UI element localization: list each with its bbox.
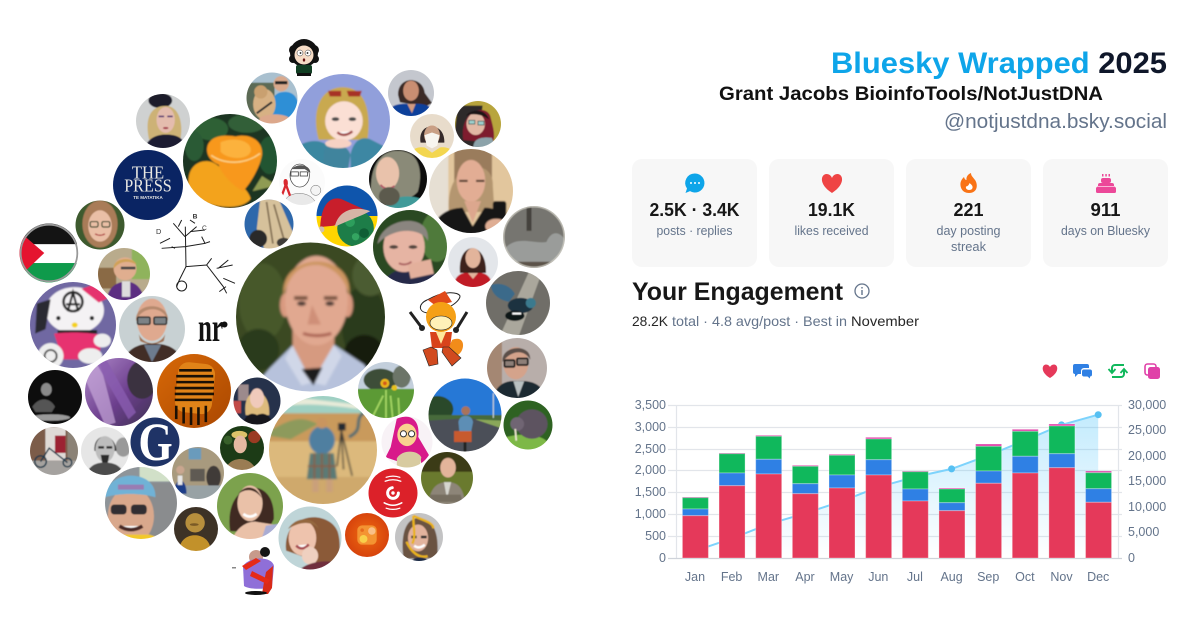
bar: Jan — [682, 497, 708, 558]
icon: quotes — [1145, 364, 1160, 379]
month labels: Sep — [977, 570, 999, 584]
avatar: daffodils in a field — [358, 362, 414, 418]
avatar: The Press logo: PRESS — [124, 176, 172, 196]
avatar: cyclist on road — [428, 378, 502, 452]
month labels: Mar — [758, 570, 779, 584]
avatar: kitty plush with anarchy symbols — [30, 282, 116, 368]
panel: day posting streak: streak — [951, 240, 987, 254]
icon: birthday cake — [1096, 174, 1116, 193]
month labels: Apr — [795, 570, 815, 584]
avatar: main profile portrait — [236, 242, 385, 392]
avatar: smiling woman with hand on chin — [278, 506, 342, 570]
cumulative area and line — [695, 411, 1102, 558]
avatar: santa hat on green ball — [316, 186, 378, 246]
left axis labels — [635, 398, 666, 565]
avatar: woman with short grey hair — [373, 210, 447, 284]
avatar: older man with crossed arms — [421, 452, 473, 504]
bar: Jun — [866, 437, 892, 558]
display name: Grant Jacobs BioinfoTools/NotJustDNA — [719, 83, 1103, 105]
avatar: orange rose — [183, 114, 277, 208]
month labels — [685, 570, 1109, 584]
avatar: bald man with glasses — [119, 296, 185, 362]
chart legend icons — [1043, 364, 1160, 379]
right axis labels: 5,000 — [1128, 525, 1159, 539]
avatar: woman in blue jacket — [388, 70, 434, 116]
icon: likes — [1043, 364, 1057, 378]
avatar: woman with glasses — [76, 200, 124, 250]
panel: likes received: likes received — [794, 224, 869, 238]
left axis labels: 1,000 — [635, 507, 666, 521]
icon: flame — [960, 173, 977, 193]
left axis labels: 3,500 — [635, 398, 666, 412]
avatar: woman in bike helmet — [101, 463, 181, 546]
drawing: Darwin tree of life sketch: B — [193, 213, 198, 220]
left axis labels: 2,500 — [635, 442, 666, 456]
avatar: blonde woman at event — [234, 378, 280, 424]
avatar: The Press logo: TE MATATIKA — [133, 195, 163, 200]
avatar: woman with yellow slime — [395, 513, 443, 561]
avatar: man in purple — [98, 248, 150, 300]
avatar: woman among Christmas decorations — [218, 424, 266, 472]
month labels: Dec — [1087, 570, 1109, 584]
drawing: Darwin tree of life sketch: C — [202, 225, 207, 232]
avatar: The Press logo: THE — [132, 162, 164, 182]
panel: likes received — [769, 159, 894, 267]
avatar: red swirl logo — [368, 468, 418, 518]
panel: posts and replies: posts · replies — [656, 224, 732, 238]
avatar: man with dog — [246, 72, 298, 124]
icon: replies — [1073, 364, 1092, 378]
avatar: kiwi bird — [504, 400, 552, 450]
panel: days on Bluesky: days on Bluesky — [1061, 224, 1151, 238]
bar: Feb — [719, 453, 745, 558]
avatar: carved stone statue — [503, 206, 565, 268]
avatar: Guardian G logo: G — [138, 412, 173, 472]
engagement summary: November — [851, 313, 919, 329]
avatar: person before stone building — [169, 444, 227, 503]
bar: Aug — [939, 488, 965, 558]
icon: reposts — [1108, 365, 1128, 377]
right axis labels: 25,000 — [1128, 423, 1166, 437]
avatar: Palestine flag button — [20, 224, 78, 282]
engagement summary: 28.2K — [632, 313, 669, 329]
bar: Mar — [756, 435, 782, 558]
right axis labels: 30,000 — [1128, 398, 1166, 412]
left axis labels: 0 — [659, 551, 666, 565]
handle: @notjustdna.bsky.social — [944, 111, 1167, 133]
icon: heart — [822, 174, 842, 193]
panel: likes received: 19.1K — [808, 200, 855, 220]
bar: Nov — [1049, 424, 1075, 558]
plot grid — [668, 405, 1122, 558]
left axis labels: 500 — [645, 529, 666, 543]
avatar: black and white portrait — [28, 370, 82, 424]
right axis labels — [1128, 398, 1166, 565]
combo chart: monthly engagement — [635, 398, 1166, 584]
month labels: Aug — [940, 570, 963, 584]
avatar: sketched man with red ribbon — [282, 164, 322, 205]
avatar: painted baby — [172, 505, 220, 553]
engagement summary — [632, 313, 919, 329]
bar: May — [829, 454, 855, 558]
bar: Dec — [1086, 471, 1112, 558]
right axis labels: 0 — [1128, 551, 1135, 565]
avatar: woman with mask — [410, 114, 454, 158]
panel: day posting streak: day posting — [936, 224, 1001, 238]
bar: Sep — [976, 444, 1002, 558]
drawing: Darwin tree of life sketch: D — [156, 227, 161, 236]
avatar: fantail bird — [486, 271, 550, 335]
logo: nr: nr — [198, 305, 223, 350]
month labels: Jan — [685, 570, 705, 584]
avatar: illustrated woman with sunglasses — [296, 74, 390, 168]
month labels: Feb — [721, 570, 742, 584]
right axis labels: 20,000 — [1128, 449, 1166, 463]
panel: days on Bluesky — [1043, 159, 1168, 267]
panel: day posting streak: 221 — [954, 200, 984, 220]
avatar: bicycle and door — [28, 425, 82, 480]
avatar: man in kilt in wheat field — [269, 396, 377, 504]
avatar: The Press logo — [113, 150, 183, 220]
heading: Your Engagement: Your Engagement — [632, 278, 844, 306]
title: Bluesky Wrapped 2025 — [831, 47, 1167, 80]
month labels: Jun — [868, 570, 888, 584]
bar: Apr — [792, 465, 818, 558]
left axis labels: 3,000 — [635, 420, 666, 434]
engagement summary: total · 4.8 avg/post · Best in — [672, 313, 847, 329]
avatar: woman with grey hair — [369, 150, 427, 208]
avatar: man with black glasses — [487, 338, 547, 398]
bar: Jul — [902, 471, 928, 558]
avatar: hug illustration — [232, 547, 274, 595]
panel: posts and replies: 2.5K · 3.4K — [650, 200, 740, 220]
avatar: bearded man black and white — [79, 425, 131, 477]
avatar: orange app logo — [345, 513, 389, 557]
avatar cluster — [17, 39, 568, 595]
avatar: smiling woman with dark hair — [214, 470, 286, 542]
left axis labels: 1,500 — [635, 485, 666, 499]
avatar: purple light rays — [85, 358, 153, 426]
right axis labels: 10,000 — [1128, 500, 1166, 514]
icon: info — [855, 284, 869, 298]
panel: posts and replies — [632, 159, 757, 267]
month labels: May — [830, 570, 854, 584]
left axis labels: 2,000 — [635, 463, 666, 477]
avatar: pink-haired cartoon — [382, 416, 432, 468]
icon: chat bubble — [685, 173, 704, 193]
month labels: Nov — [1050, 570, 1073, 584]
month labels: Oct — [1015, 570, 1035, 584]
panel: day posting streak — [906, 159, 1031, 267]
bar: Oct — [1012, 429, 1038, 558]
avatar: blonde woman in black — [429, 149, 513, 233]
avatar: cowboy fox cartoon — [410, 291, 467, 366]
avatar: goth woman — [136, 94, 190, 148]
panel: days on Bluesky: 911 — [1090, 200, 1120, 220]
avatar: woman in red — [448, 237, 498, 287]
avatar: cathedral tower — [244, 200, 294, 248]
right axis labels: 15,000 — [1128, 474, 1166, 488]
month labels: Jul — [907, 570, 923, 584]
avatar: vintage microphone — [157, 354, 231, 428]
drawing: Darwin tree of life sketch — [156, 213, 235, 293]
avatar: woman with red hair — [455, 101, 501, 147]
stacked bars — [682, 424, 1112, 558]
avatar: south park cartoon — [289, 39, 319, 76]
